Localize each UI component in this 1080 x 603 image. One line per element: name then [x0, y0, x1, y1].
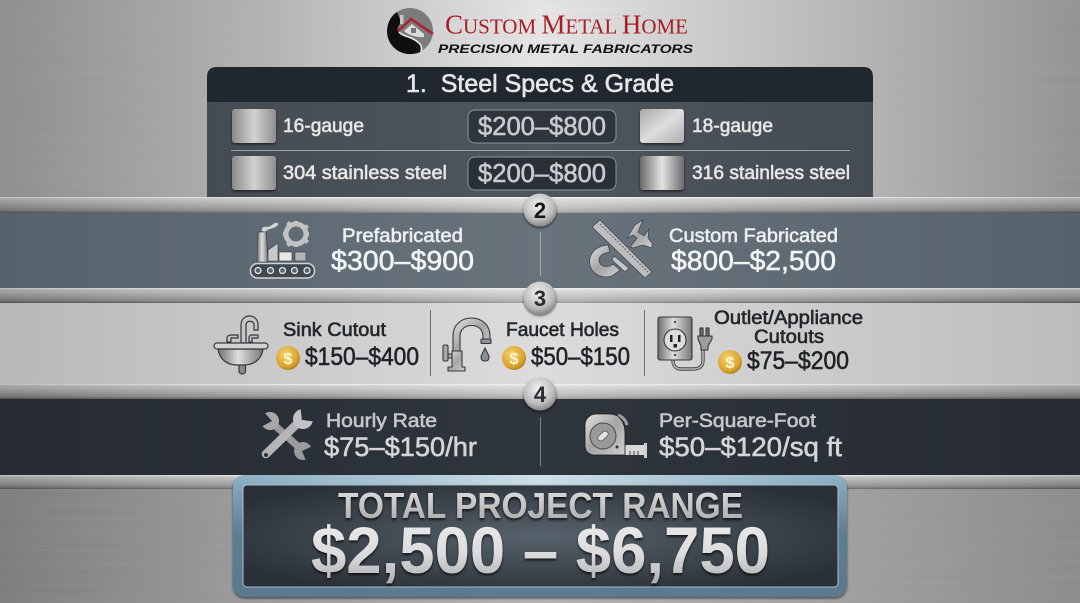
price: per-square-foot: $50–$120/sq ft	[659, 432, 843, 462]
swatch: 18-gauge	[640, 109, 684, 143]
icon: factory and gear	[250, 221, 314, 278]
label: outlet/appliance cutouts: Outlet/Appliance	[714, 308, 863, 329]
label: outlet/appliance cutouts: Cutouts	[754, 327, 824, 348]
icon: coin: $	[284, 351, 293, 368]
label: 316 stainless steel: 316 stainless steel	[692, 162, 850, 184]
icon: house logo	[387, 8, 433, 54]
label: hourly rate: Hourly Rate	[326, 411, 437, 432]
price: sink cutout: $150–$400	[305, 343, 419, 371]
swatch: 304 stainless	[232, 156, 276, 190]
label: 16-gauge: 16-gauge	[283, 115, 364, 137]
label: 304 stainless steel: 304 stainless steel	[283, 162, 447, 184]
panel: 1 steel specs and grade	[207, 67, 873, 197]
price: hourly rate: $75–$150/hr	[324, 432, 477, 462]
badge 2: 2	[534, 198, 546, 223]
price: custom fabricated: $800–$2,500	[671, 245, 836, 276]
icon: coin	[276, 346, 300, 370]
logo: Custom Metal Home	[387, 8, 693, 56]
icon: outlet and plug	[658, 317, 712, 369]
price box row 1: $200–$800	[478, 111, 606, 141]
logo tagline: PRECISION METAL FABRICATORS	[438, 44, 693, 56]
logo wordmark: CUSTOM METAL HOME	[445, 10, 688, 40]
icon: coin: $	[510, 351, 519, 368]
swatch: 316 stainless	[640, 156, 684, 190]
label: 18-gauge: 18-gauge	[692, 115, 773, 137]
divider bars	[0, 197, 1080, 489]
icon: sink	[214, 316, 268, 374]
badge 2	[524, 194, 556, 226]
badge 4	[524, 378, 556, 410]
panel: total project range	[233, 475, 847, 597]
label: faucet holes: Faucet Holes	[506, 320, 619, 341]
swatch: 16-gauge	[232, 109, 276, 143]
heading: total project range: TOTAL PROJECT RANGE	[338, 485, 743, 526]
panel: 4 labor rate	[0, 399, 1080, 475]
price: outlet cutouts: $75–$200	[747, 347, 849, 375]
panel: 2 fabrication type	[0, 213, 1080, 288]
price: prefabricated: $300–$900	[331, 245, 474, 276]
icon: coin	[718, 350, 742, 374]
label: outlet/appliance cutouts	[714, 308, 863, 348]
label: sink cutout: Sink Cutout	[283, 320, 387, 341]
badge 3: 3	[534, 286, 546, 311]
heading: steel specs: 1. Steel Specs & Grade	[406, 70, 674, 98]
icon: tape measure	[585, 414, 647, 458]
label: per-square-foot: Per-Square-Foot	[659, 411, 817, 432]
icon: coin	[502, 346, 526, 370]
icon: ruler, caliper, micrometer	[590, 220, 652, 278]
icon: faucet	[443, 318, 491, 371]
total value: $2,500 – $6,750	[311, 513, 770, 587]
badge 4: 4	[534, 382, 547, 407]
price: faucet holes: $50–$150	[531, 343, 630, 371]
panel: 3 cutouts	[0, 303, 1080, 384]
icon: crossed wrenches	[256, 408, 316, 463]
price box row 2: $200–$800	[478, 158, 606, 188]
icon: coin: $	[726, 355, 735, 372]
label: custom fabricated: Custom Fabricated	[669, 225, 838, 247]
badge 3	[524, 282, 556, 314]
label: prefabricated: Prefabricated	[342, 225, 463, 247]
